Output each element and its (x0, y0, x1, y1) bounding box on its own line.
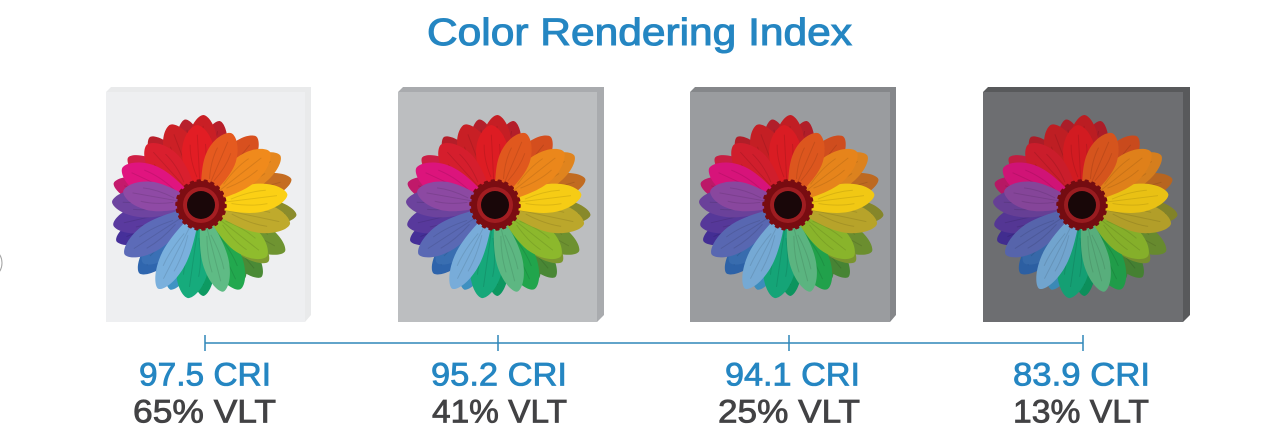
flower: panel 2 (404, 115, 592, 300)
panel: 65% VLT sample (106, 87, 311, 322)
label: 65% VLT: 65% VLT (133, 394, 276, 430)
timeline connector with ticks (205, 335, 1083, 351)
flower: panel 1 (110, 115, 298, 300)
partial circle at left edge (0, 247, 2, 279)
label: 94.1 CRI: 94.1 CRI (725, 356, 860, 392)
panel: 13% VLT sample (983, 87, 1190, 322)
panel: 41% VLT sample (398, 87, 604, 322)
flower: panel 4 (991, 115, 1179, 300)
label: 41% VLT: 41% VLT (432, 394, 567, 430)
title: Color Rendering Index (427, 12, 852, 54)
label: 25% VLT: 25% VLT (718, 394, 860, 430)
label: 13% VLT: 13% VLT (1013, 394, 1149, 430)
label: 95.2 CRI: 95.2 CRI (431, 356, 567, 392)
label: 83.9 CRI: 83.9 CRI (1013, 356, 1150, 392)
panel: 25% VLT sample (690, 87, 896, 322)
flower: panel 3 (697, 115, 885, 300)
label: 97.5 CRI: 97.5 CRI (139, 356, 271, 392)
